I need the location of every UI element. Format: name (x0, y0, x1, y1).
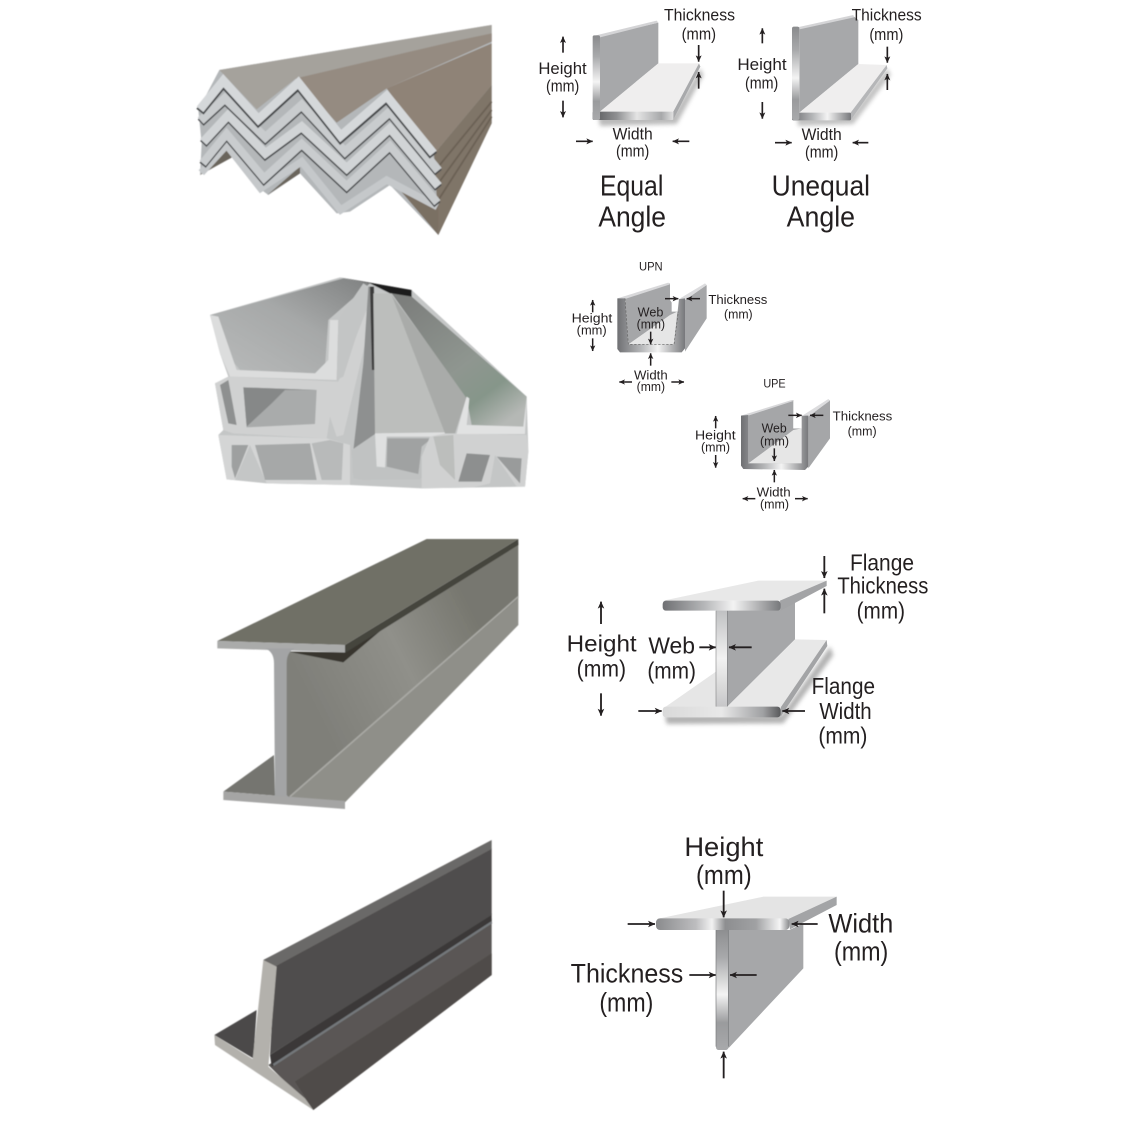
labels: UPN: (mm) (577, 323, 607, 337)
heading: Equal Angle: Equal (600, 171, 663, 203)
labels: T-bar: Thickness (571, 959, 683, 989)
arrows: angle dimensions (563, 28, 887, 143)
labels: UPN: (mm) (724, 307, 753, 321)
labels: angle dimensions: (mm) (805, 143, 838, 162)
photo: stacked channel bars (210, 277, 528, 488)
heading: UPE: UPE (763, 376, 786, 390)
labels: I-beam: Height (567, 631, 637, 657)
labels: UPE: Height (695, 428, 736, 442)
labels: UPN: (mm) (637, 317, 665, 331)
diagram: T-bar section (571, 832, 893, 1078)
labels: angle dimensions: Height (737, 55, 787, 74)
labels: T-bar: (mm) (599, 988, 653, 1018)
heading: Equal Angle (598, 171, 666, 234)
middle channel (215, 310, 368, 438)
labels: angle dimensions: (mm) (869, 25, 903, 44)
labels: UPN: Thickness (708, 293, 767, 307)
labels: UPE: Width (757, 486, 791, 500)
labels: UPN: Height (572, 311, 613, 325)
upe shape (741, 399, 830, 470)
labels: T-bar: (mm) (834, 937, 888, 967)
arrows: T-bar (628, 891, 818, 1078)
T-bar shape (656, 897, 837, 1050)
photo: stacked equal angle bars (198, 25, 492, 235)
labels: I-beam: Flange (812, 673, 875, 699)
labels: UPN: (mm) (637, 380, 665, 394)
photo: I-beam (217, 539, 518, 809)
labels: I-beam (567, 550, 928, 748)
top channel (210, 278, 370, 373)
labels: angle dimensions: Thickness (852, 6, 922, 25)
labels: UPE (695, 410, 892, 511)
labels: I-beam: (mm) (647, 657, 696, 683)
labels: I-beam: Width (819, 698, 872, 724)
labels: T-bar: Width (828, 909, 893, 939)
labels: UPE: Web (762, 422, 787, 436)
upn shape (617, 283, 707, 352)
labels: UPN (572, 293, 767, 394)
labels: T-bar (571, 832, 893, 1018)
labels: angle dimensions: Width (802, 125, 842, 144)
labels: UPE: (mm) (760, 435, 789, 449)
labels: UPN: Width (634, 368, 668, 382)
arrows: UPN (593, 299, 700, 382)
labels: angle dimensions: Thickness (664, 6, 735, 25)
labels: UPE: (mm) (701, 441, 730, 455)
labels: UPE: (mm) (848, 424, 877, 438)
labels: angle dimensions: Height (538, 59, 587, 78)
diagram: equal and unequal angle (538, 6, 922, 234)
labels: angle dimensions: (mm) (682, 24, 716, 43)
right channels (422, 433, 528, 488)
labels: I-beam: Thickness (837, 572, 928, 598)
labels: T-bar: Height (684, 832, 764, 862)
labels: UPE: (mm) (760, 497, 789, 511)
labels: angle dimensions: Width (613, 124, 653, 143)
diagram: UPN channel (572, 260, 892, 511)
equal angle shape (593, 21, 703, 126)
I-beam shape (663, 581, 833, 724)
labels: T-bar: (mm) (696, 860, 752, 890)
labels: UPE: Thickness (833, 410, 892, 424)
unequal angle shape (792, 15, 891, 126)
labels: I-beam: (mm) (818, 722, 867, 748)
arrows: UPE (716, 415, 823, 499)
lower channel (218, 435, 350, 485)
labels: angle dimensions: (mm) (745, 73, 778, 92)
photo: T-bar (214, 840, 492, 1110)
diagram: I-beam section (567, 550, 928, 748)
heading: Equal Angle: Angle (598, 202, 666, 234)
labels: angle dimensions: (mm) (546, 77, 579, 96)
heading: Unequal Angle (772, 171, 870, 234)
heading: UPN: UPN (639, 260, 663, 274)
centre channel (353, 287, 377, 450)
labels: angle dimensions: (mm) (616, 142, 649, 161)
labels: I-beam: (mm) (577, 656, 626, 682)
labels: UPN: Web (638, 305, 663, 319)
labels: I-beam: Flange (850, 550, 914, 576)
arrows: I-beam (601, 556, 824, 716)
labels: I-beam: (mm) (857, 597, 905, 623)
heading: Unequal Angle: Angle (787, 202, 855, 234)
labels: angle dimensions (538, 6, 922, 162)
heading: Unequal Angle: Unequal (772, 171, 870, 203)
labels: I-beam: Web (648, 632, 695, 658)
